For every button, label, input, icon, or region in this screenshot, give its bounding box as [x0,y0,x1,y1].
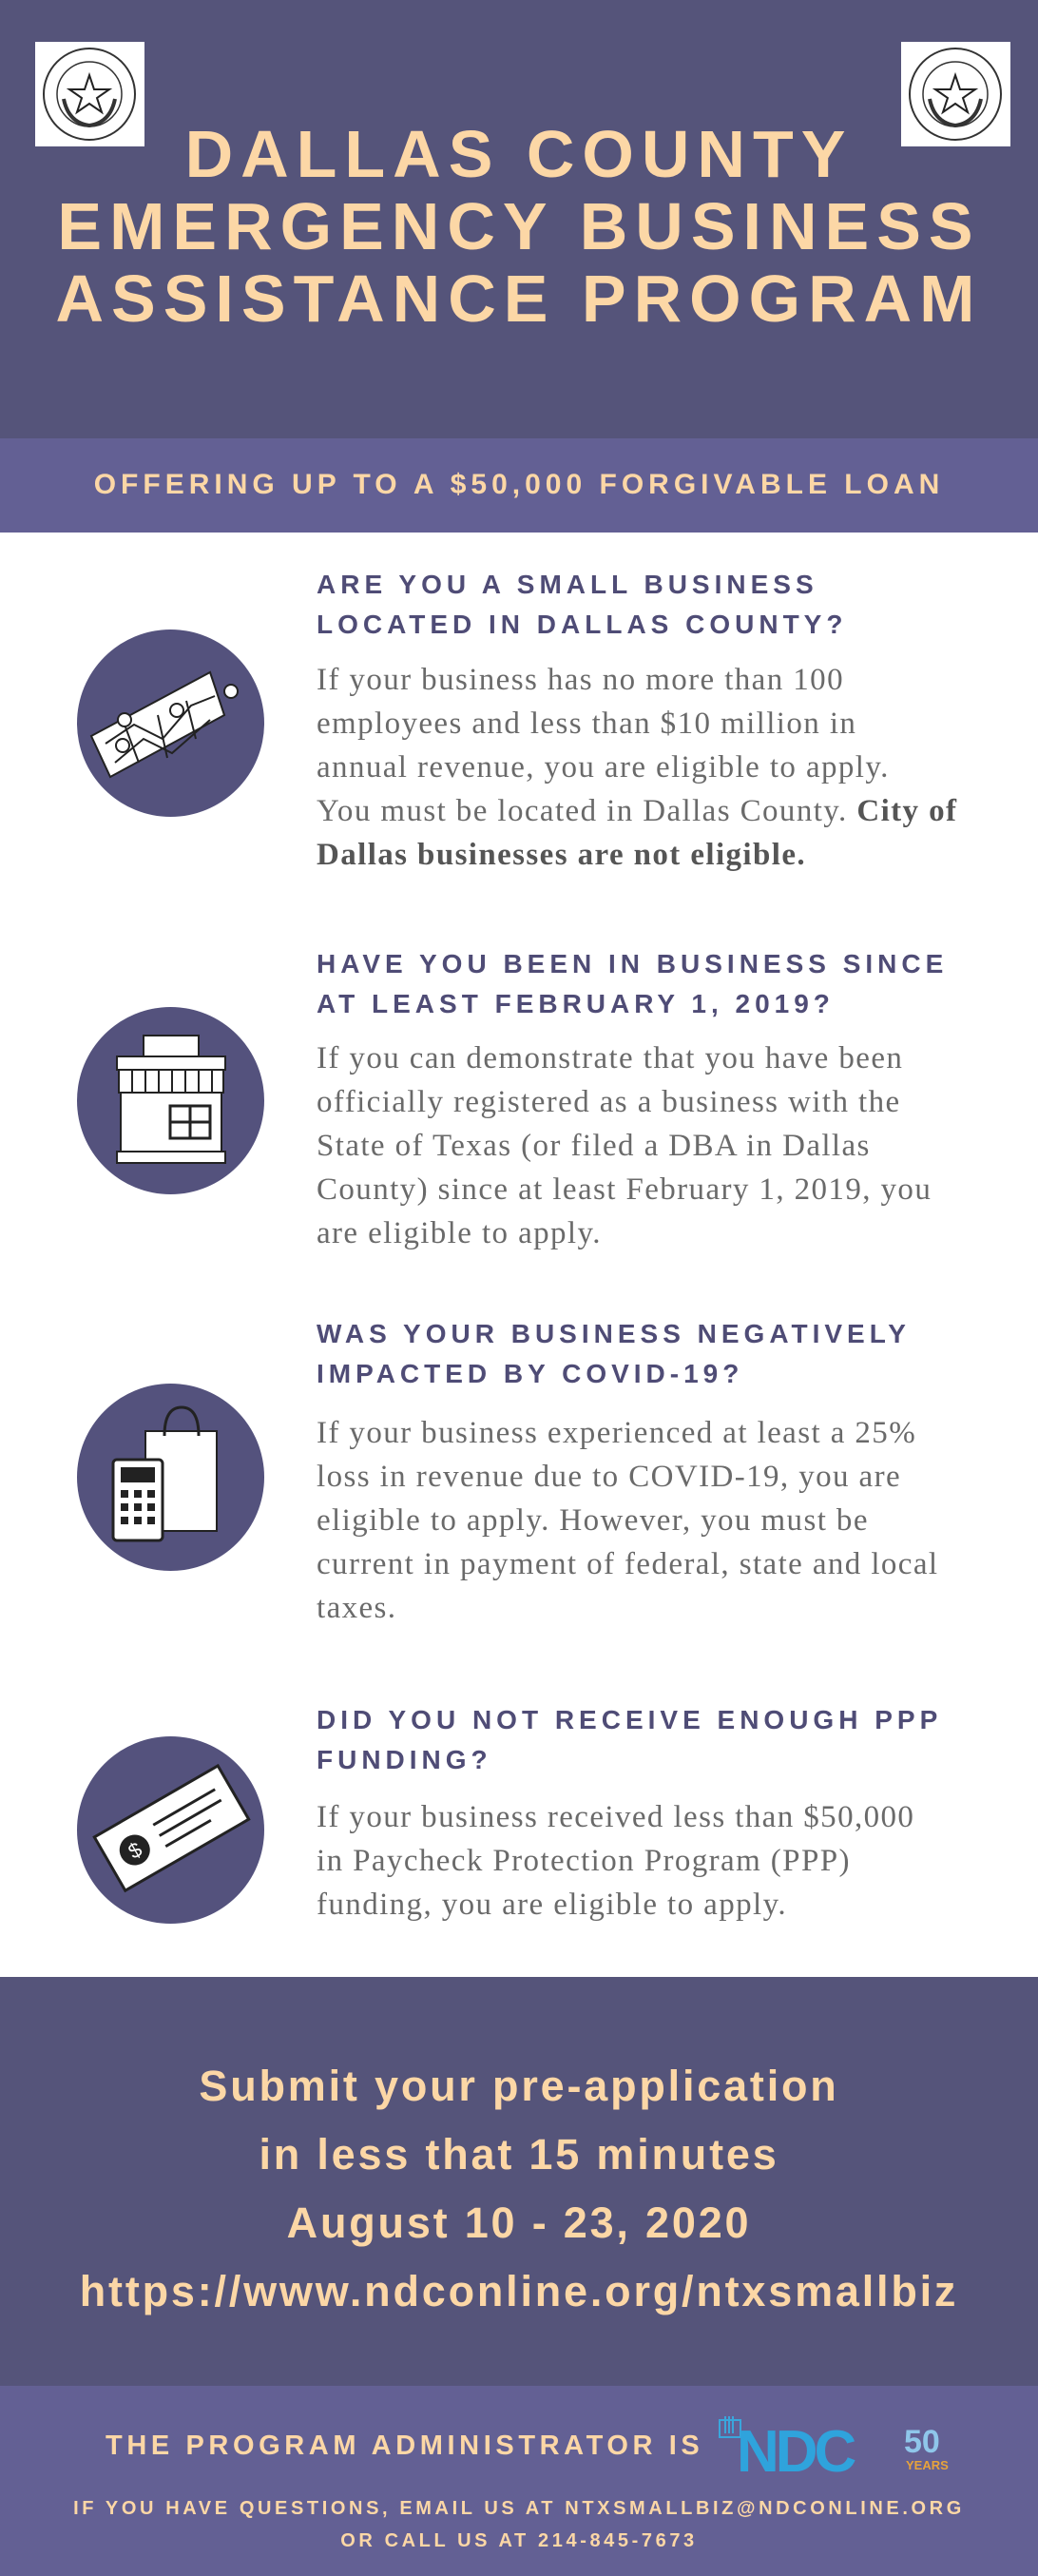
heading: covid impact [317,1319,911,1388]
footer panel [0,2386,1038,2576]
contact text: IF YOU HAVE QUESTIONS, EMAIL US AT NTXSMALLBIZ@NDCONLINE.ORG [73,2498,965,2519]
icon: check [77,1736,264,1924]
icon: register and shopping bag [77,1384,264,1571]
logo: NDC 50 years: YEARS [906,2458,949,2472]
text: small business [317,663,957,872]
text: ppp funding: If your business received less than $50,000 [317,1800,914,1834]
header panel [0,0,1038,438]
icon: storefront [77,1007,264,1194]
text: covid impact: loss in revenue due to COVID-19, you are [317,1460,901,1494]
text: covid impact: If your business experienced at least a 25% [317,1416,916,1450]
heading: covid impact: WAS YOUR BUSINESS NEGATIVELY [317,1319,911,1348]
text: small business: You must be located in Dallas County. City of [317,794,957,828]
heading: small business: LOCATED IN DALLAS COUNTY? [317,610,847,639]
title: DALLAS COUNTY [185,117,853,191]
heading: in business since: HAVE YOU BEEN IN BUSINESS SINCE [317,949,948,978]
logo: NDC 50 years [719,2416,949,2476]
logo: county seal right [901,42,1010,146]
text: in business since: are eligible to apply. [317,1216,602,1250]
text: ppp funding [317,1800,914,1922]
logo: NDC 50 years: 50 [904,2424,940,2460]
logo: county seal left [35,42,144,146]
text: ppp funding: in Paycheck Protection Program (PPP) [317,1844,851,1878]
heading: ppp funding: DID YOU NOT RECEIVE ENOUGH PPP [317,1705,942,1734]
contact text: OR CALL US AT 214-845-7673 [340,2530,698,2551]
text: ppp funding: funding, you are eligible to apply. [317,1888,787,1922]
call to action text: August 10 - 23, 2020 [287,2198,751,2247]
heading: covid impact: IMPACTED BY COVID-19? [317,1359,743,1388]
banner: forgivable loan: OFFERING UP TO A $50,000 FORGIVABLE LOAN [94,469,944,500]
heading: in business since: AT LEAST FEBRUARY 1, 2019? [317,989,835,1018]
icon: check: $ [124,1837,146,1864]
title: ASSISTANCE PROGRAM [55,261,982,336]
text: in business since: If you can demonstrate that you have been [317,1041,903,1075]
text: in business since: officially registered as a business with the [317,1085,901,1119]
text: small business: employees and less than $10 million in [317,707,856,741]
heading: small business [317,570,847,639]
call to action text: Submit your pre-application [199,2062,839,2110]
text: in business since: State of Texas (or filed a DBA in Dallas [317,1129,871,1163]
call to action text: in less that 15 minutes [259,2130,779,2179]
text: in business since: County) since at least February 1, 2019, you [317,1172,932,1207]
administrator text: THE PROGRAM ADMINISTRATOR IS [106,2431,703,2461]
title: EMERGENCY BUSINESS [57,189,981,263]
text: covid impact: eligible to apply. However, you must be [317,1503,869,1538]
title [55,117,982,336]
heading: small business: ARE YOU A SMALL BUSINESS [317,570,818,599]
call to action panel [0,1977,1038,2386]
heading: in business since [317,949,948,1018]
text: covid impact: taxes. [317,1591,396,1625]
contact text [73,2498,965,2551]
text: small business: annual revenue, you are eligible to apply. [317,750,890,784]
text: small business: If your business has no more than 100 [317,663,844,697]
text: in business since [317,1041,932,1250]
call to action text [80,2062,958,2315]
text: small business: Dallas businesses are not eligible. [317,838,806,872]
call to action text: https://www.ndconline.org/ntxsmallbiz [80,2267,958,2315]
text: covid impact: current in payment of federal, state and local [317,1547,938,1581]
heading: ppp funding [317,1705,942,1774]
icon: map [77,629,264,817]
text: covid impact [317,1416,938,1625]
banner: forgivable loan [0,438,1038,533]
heading: ppp funding: FUNDING? [317,1745,492,1774]
